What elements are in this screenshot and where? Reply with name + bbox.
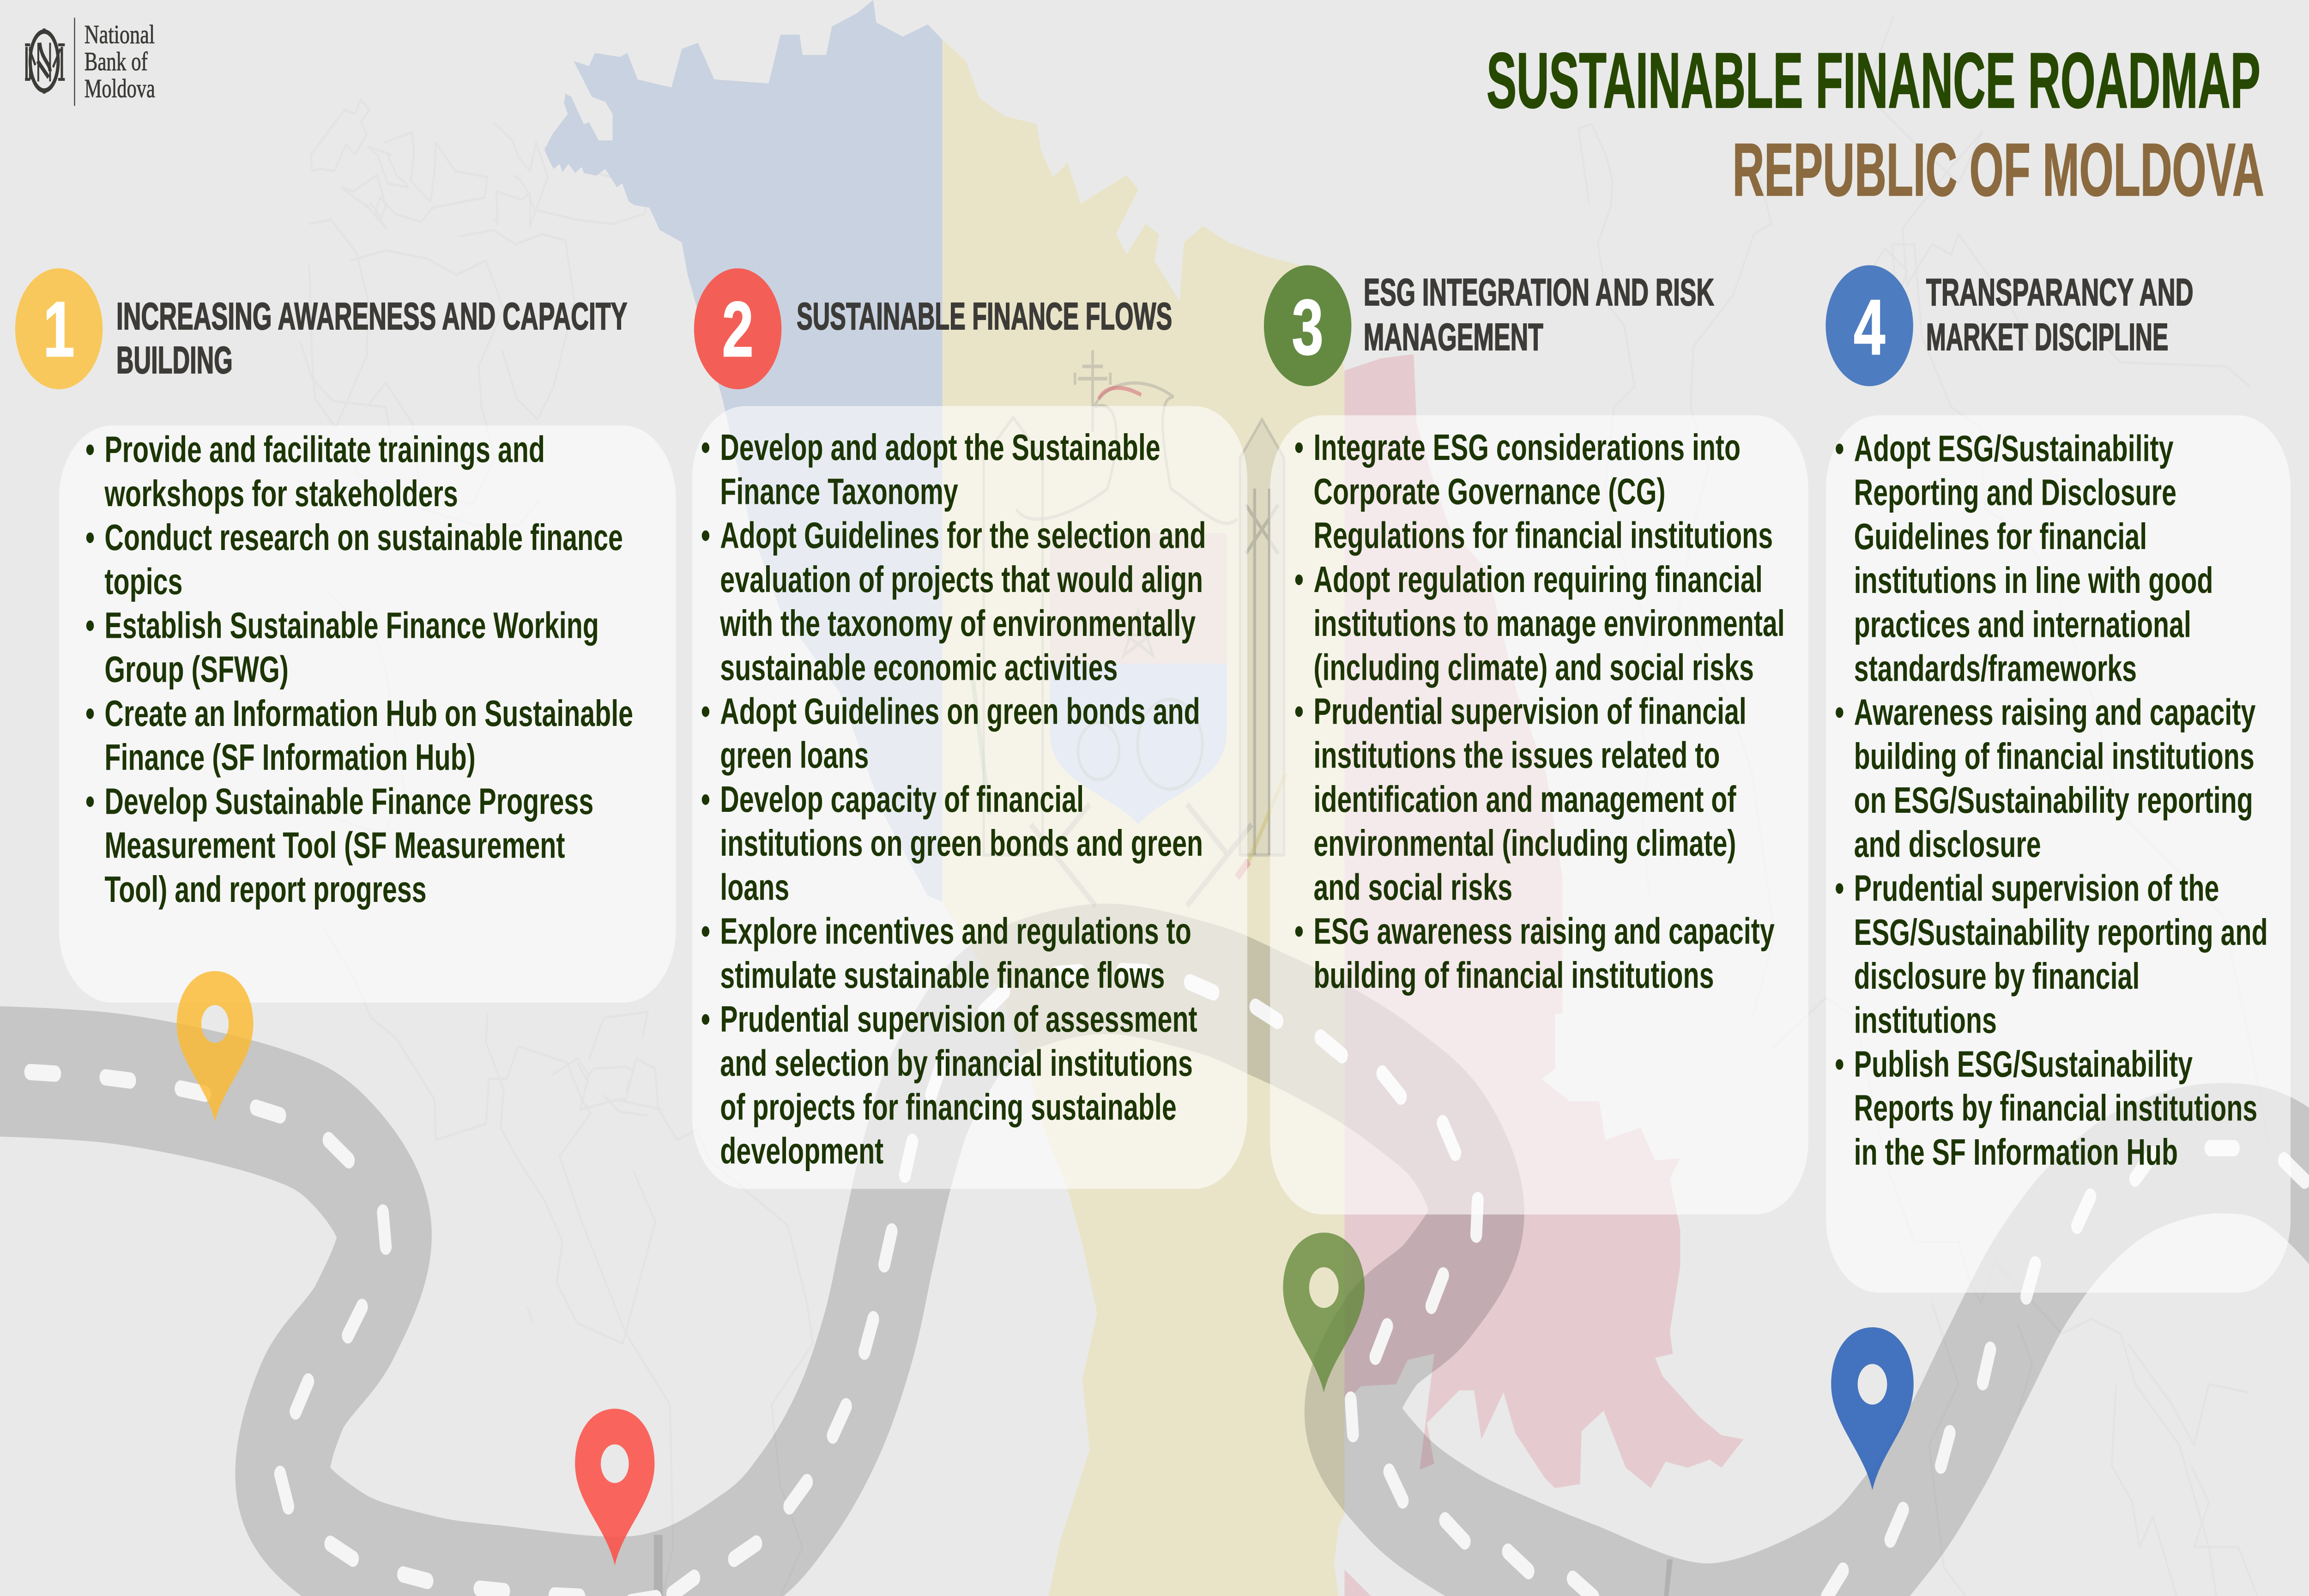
icon: yellow map pin xyxy=(177,971,253,1122)
step 2 text: loans xyxy=(720,866,789,908)
step 1 badge xyxy=(15,268,103,389)
step 4 text: Guidelines for financial xyxy=(1854,516,2147,557)
emblem shield xyxy=(1050,533,1227,824)
step 1 text: Provide and facilitate trainings and xyxy=(104,429,545,470)
step 4 heading: TRANSPARANCY AND xyxy=(1926,272,2194,314)
step 3 heading: ESG INTEGRATION AND RISK xyxy=(1364,272,1714,314)
step 2 text: of projects for financing sustainable xyxy=(720,1086,1177,1128)
step 1 text: Finance (SF Information Hub) xyxy=(104,737,476,778)
step 1 text: Develop Sustainable Finance Progress xyxy=(104,780,593,822)
logo monogram icon xyxy=(25,29,65,94)
step 4 badge xyxy=(1825,265,1913,386)
step 3 text: • xyxy=(1294,427,1304,468)
step 2 text: • xyxy=(701,998,710,1040)
step 3 text: Adopt regulation requiring financial xyxy=(1313,559,1763,600)
step 3 text: Integrate ESG considerations into xyxy=(1313,427,1741,468)
step 4 text: Awareness raising and capacity xyxy=(1854,692,2256,733)
step 2 badge: 2 xyxy=(722,286,754,373)
step 4 text: Reporting and Disclosure xyxy=(1854,472,2176,513)
icon: red map pin xyxy=(575,1409,654,1566)
step 3 badge: 3 xyxy=(1292,284,1324,371)
step 3 text: Regulations for financial institutions xyxy=(1313,514,1773,556)
step 4 heading: MARKET DISCIPLINE xyxy=(1926,316,2168,359)
step 4 text: institutions xyxy=(1854,999,1997,1040)
step 2 text: Prudential supervision of assessment xyxy=(720,998,1197,1040)
step 4 text: and disclosure xyxy=(1854,823,2041,865)
step 3 text: Corporate Governance (CG) xyxy=(1313,471,1666,512)
step 3 text: • xyxy=(1294,690,1304,732)
road lane dashes xyxy=(30,971,2304,1596)
step 1 text: workshops for stakeholders xyxy=(104,473,458,514)
step 4 text: disclosure by financial xyxy=(1854,955,2140,997)
logo wordmark: Bank of xyxy=(85,47,148,76)
step 1 text: • xyxy=(85,517,95,558)
step 1 text: • xyxy=(85,780,95,822)
step 4 text: • xyxy=(1835,428,1844,469)
logo: National Bank of Moldova xyxy=(25,18,155,106)
step 2 text: Finance Taxonomy xyxy=(720,471,958,512)
step 4 text: institutions in line with good xyxy=(1854,560,2213,601)
step 4 text: • xyxy=(1835,692,1844,733)
step 2 text: institutions on green bonds and green xyxy=(720,822,1203,864)
panel 3 background xyxy=(1270,415,1808,1215)
step 1 text: Group (SFWG) xyxy=(104,649,289,690)
step 1 heading: INCREASING AWARENESS AND CAPACITY xyxy=(116,295,627,338)
step 2 text: green loans xyxy=(720,735,869,776)
step 4 text: practices and international xyxy=(1854,604,2191,645)
step 3 heading: MANAGEMENT xyxy=(1364,316,1543,359)
step 3 badge xyxy=(1264,265,1351,386)
step 2 text: and selection by financial institutions xyxy=(720,1042,1193,1083)
step 4 text: Publish ESG/Sustainability xyxy=(1854,1043,2193,1085)
logo wordmark: National xyxy=(85,19,155,49)
step 4 text: ESG/Sustainability reporting and xyxy=(1854,912,2268,953)
step 3 text: ESG awareness raising and capacity xyxy=(1313,910,1775,952)
step 3 text: identification and management of xyxy=(1313,779,1736,820)
step 2 text: development xyxy=(720,1130,883,1172)
step 2 text: • xyxy=(701,779,710,820)
step 1 text: • xyxy=(85,693,95,734)
step 4 badge: 4 xyxy=(1854,284,1885,371)
step 2 heading: SUSTAINABLE FINANCE FLOWS xyxy=(797,295,1172,338)
step 3 text: environmental (including climate) xyxy=(1313,822,1736,864)
step 2 text: • xyxy=(701,514,710,556)
logo wordmark: Moldova xyxy=(85,73,155,103)
step 2 text: • xyxy=(701,690,710,732)
step 4 text: • xyxy=(1835,1043,1844,1085)
step 3 text: • xyxy=(1294,910,1304,952)
step 1 heading: BUILDING xyxy=(116,339,233,381)
logo divider xyxy=(74,18,75,106)
panel 4 background xyxy=(1826,415,2291,1293)
step 4 text: standards/frameworks xyxy=(1854,647,2137,689)
icon: green map pin xyxy=(1283,1233,1365,1392)
icon: blue map pin xyxy=(1831,1327,1914,1490)
step 1 text: topics xyxy=(104,561,182,602)
step 2 text: Adopt Guidelines for the selection and xyxy=(720,514,1206,556)
road xyxy=(0,969,2309,1596)
step 3 text: and social risks xyxy=(1313,866,1512,908)
step 4 text: Reports by financial institutions xyxy=(1854,1088,2257,1129)
coat of arms emblem xyxy=(972,350,1286,906)
step 1 text: Tool) and report progress xyxy=(104,869,427,910)
step 1 text: Establish Sustainable Finance Working xyxy=(104,605,599,646)
step 1 text: Create an Information Hub on Sustainable xyxy=(104,693,633,734)
step 2 text: stimulate sustainable finance flows xyxy=(720,955,1165,996)
step 3 text: institutions the issues related to xyxy=(1313,735,1720,776)
step 2 text: Develop and adopt the Sustainable xyxy=(720,427,1161,468)
map of Moldova in flag colours xyxy=(530,0,1757,1596)
step 3 text: institutions to manage environmental xyxy=(1313,603,1785,644)
step 2 text: • xyxy=(701,427,710,468)
step 1 badge: 1 xyxy=(43,286,75,373)
step 1 text: Measurement Tool (SF Measurement xyxy=(104,824,565,866)
step 2 text: evaluation of projects that would align xyxy=(720,559,1203,600)
step 3 text: Prudential supervision of financial xyxy=(1313,690,1747,732)
panel 2 background xyxy=(692,406,1247,1189)
step 3 text: • xyxy=(1294,559,1304,600)
step 2 text: Adopt Guidelines on green bonds and xyxy=(720,690,1200,732)
step 2 text: • xyxy=(701,910,710,952)
step 2 badge xyxy=(694,268,781,389)
step 1 text: • xyxy=(85,605,95,646)
step 4 text: on ESG/Sustainability reporting xyxy=(1854,780,2253,821)
step 3 text: (including climate) and social risks xyxy=(1313,647,1754,688)
step 1 text: • xyxy=(85,429,95,470)
step 4 text: • xyxy=(1835,867,1844,909)
step 4 text: Prudential supervision of the xyxy=(1854,867,2219,909)
step 1 text: Conduct research on sustainable finance xyxy=(104,517,623,558)
road seams xyxy=(654,1535,1673,1596)
step 4 text: Adopt ESG/Sustainability xyxy=(1854,428,2174,469)
panel 1 background xyxy=(59,425,676,1003)
step 4 text: in the SF Information Hub xyxy=(1854,1131,2178,1173)
step 4 text: building of financial institutions xyxy=(1854,736,2255,777)
step 2 text: Develop capacity of financial xyxy=(720,779,1084,820)
step 2 text: sustainable economic activities xyxy=(720,647,1118,688)
step 2 text: with the taxonomy of environmentally xyxy=(719,603,1196,644)
step 3 text: building of financial institutions xyxy=(1313,955,1714,996)
step 2 text: Explore incentives and regulations to xyxy=(720,910,1191,952)
